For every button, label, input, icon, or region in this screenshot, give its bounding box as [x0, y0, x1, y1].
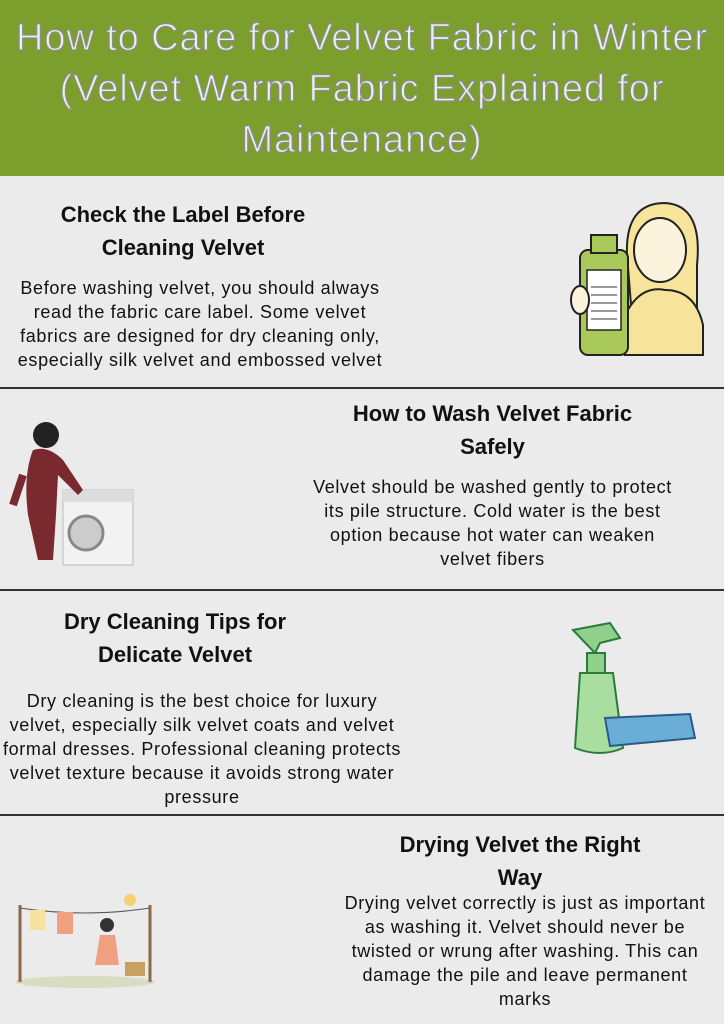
section 4 heading: Way [498, 865, 542, 890]
section 1 text: Before washing velvet, you should always [20, 278, 380, 298]
section 3 text: formal dresses. Professional cleaning protects [3, 739, 401, 759]
section 4 text [345, 893, 705, 1009]
section 1 text [18, 278, 382, 370]
section 1 heading: Cleaning Velvet [102, 235, 264, 260]
icon: woman at washing machine [9, 422, 134, 566]
title: Maintenance) [241, 119, 483, 161]
section 3 heading: Delicate Velvet [98, 642, 252, 667]
header banner [0, 0, 724, 176]
section 4 heading: Drying Velvet the Right [400, 832, 640, 857]
section 1 text: read the fabric care label. Some velvet [34, 302, 366, 322]
icon: woman with bottle [570, 202, 704, 356]
section 1 heading: Check the Label Before [61, 202, 305, 227]
section 4 text: as washing it. Velvet should never be [365, 917, 685, 937]
title: How to Care for Velvet Fabric in Winter [16, 17, 708, 59]
section 1 text: fabrics are designed for dry cleaning only, [20, 326, 380, 346]
section 4 text: Drying velvet correctly is just as important [345, 893, 705, 913]
section 1 text: especially silk velvet and embossed velvet [18, 350, 382, 370]
section 3 text: velvet, especially silk velvet coats and velvet [10, 715, 394, 735]
section 4 heading [400, 832, 640, 890]
section 3 heading: Dry Cleaning Tips for [64, 609, 286, 634]
section 3 heading [64, 609, 286, 667]
section 2 text: velvet fibers [440, 549, 545, 569]
section 1 heading [61, 202, 305, 260]
section 2 text: option because hot water can weaken [330, 525, 655, 545]
section 4 text: twisted or wrung after washing. This can [352, 941, 698, 961]
section 2 text: Velvet should be washed gently to protect [313, 477, 672, 497]
section 3 text: Dry cleaning is the best choice for luxury [27, 691, 377, 711]
section 2 heading [353, 401, 632, 459]
section 3 text [3, 691, 401, 807]
section 2 heading: How to Wash Velvet Fabric [353, 401, 632, 426]
section 4 text: marks [499, 989, 551, 1009]
title [16, 17, 708, 161]
section 4 text: damage the pile and leave permanent [363, 965, 687, 985]
title: (Velvet Warm Fabric Explained for [60, 68, 664, 110]
section 3 text: velvet texture because it avoids strong water [10, 763, 394, 783]
section 2 text [313, 477, 672, 569]
section 2 heading: Safely [460, 434, 525, 459]
section 2 text: its pile structure. Cold water is the best [324, 501, 661, 521]
section 3 text: pressure [164, 787, 240, 807]
icon: clothesline with girl [15, 894, 155, 988]
icon: spray bottle and cloth [571, 622, 696, 754]
